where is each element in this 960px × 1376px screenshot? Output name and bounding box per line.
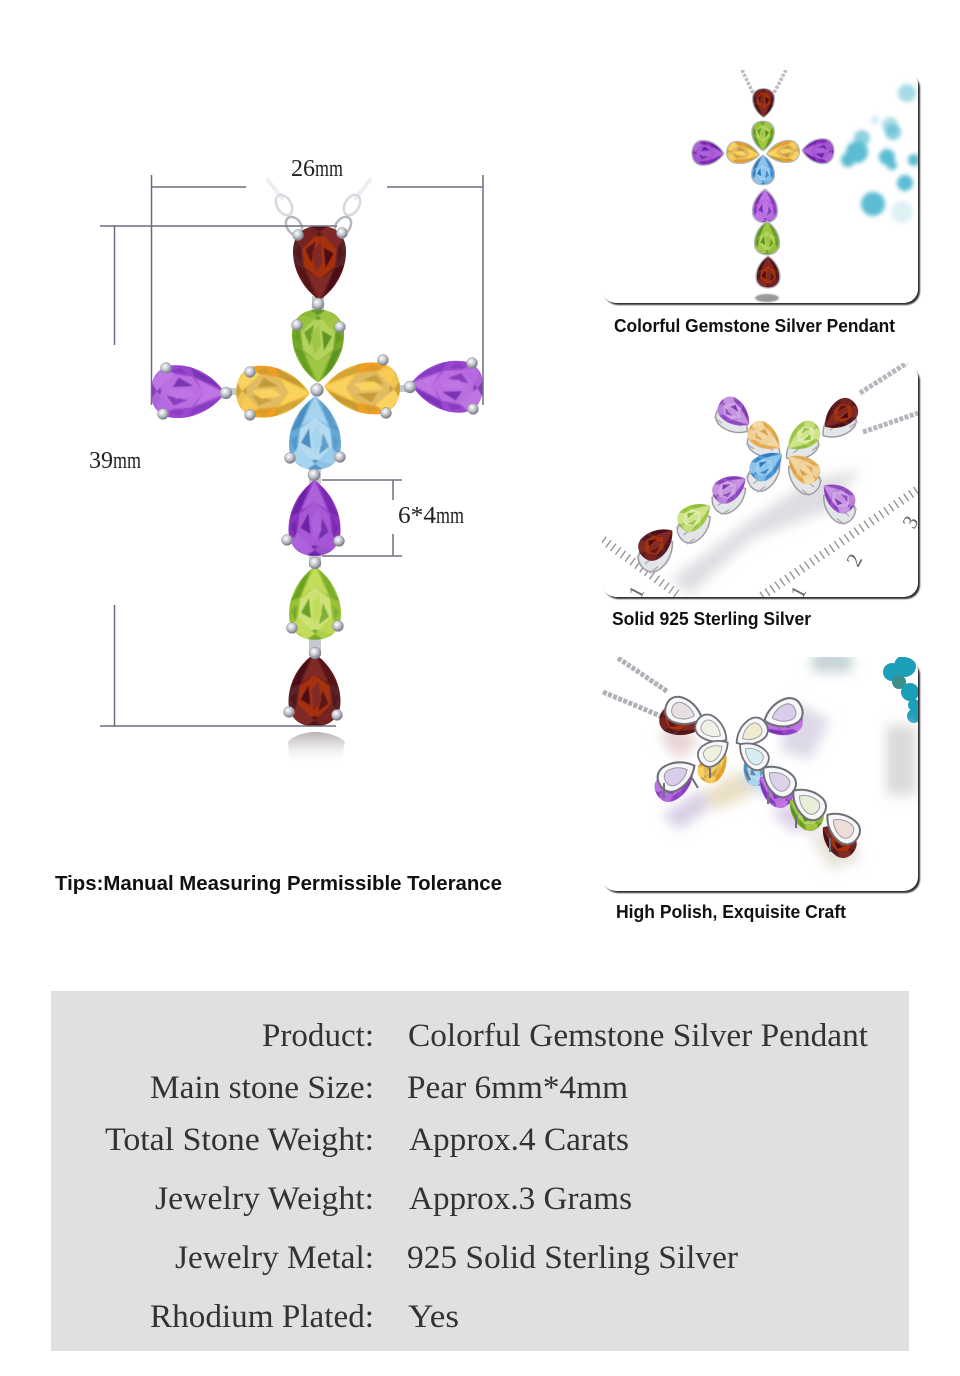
ruler numbers: 2: [841, 550, 867, 570]
gem: right citrine: [321, 357, 403, 419]
row: jewelry metal: 925 Solid Sterling Silver: [407, 1240, 738, 1276]
silver settings: [633, 399, 861, 577]
blue flowers: [883, 657, 918, 723]
label: width 26mm: [291, 156, 343, 182]
angled stones: [638, 396, 858, 561]
ruler numbers: 1: [623, 582, 649, 602]
blurred background shadows: [660, 650, 916, 870]
row: rhodium plated: Rhodium Plated:: [150, 1299, 374, 1335]
chain: [742, 70, 786, 93]
panel: back view: [602, 650, 921, 893]
gem: lower peridot: [285, 564, 345, 642]
gem: upper peridot: [288, 308, 348, 384]
coloured stone undersides: [654, 708, 857, 858]
row: main stone size: [150, 1070, 628, 1106]
label: height 39mm: [89, 448, 141, 474]
row: rhodium plated: Yes: [408, 1299, 459, 1335]
table background: [51, 991, 909, 1351]
gem: left amethyst: [148, 360, 228, 424]
contact shadow: [755, 294, 779, 302]
ruler numbers: [630, 516, 918, 597]
row: jewelry metal: [175, 1240, 738, 1276]
caption: back view: High Polish, Exquisite Craft: [616, 902, 846, 922]
reflection: [288, 732, 345, 766]
row: jewelry weight: [155, 1181, 632, 1217]
caption: ruler view: Solid 925 Sterling Silver: [612, 609, 811, 629]
label: stone size 6*4mm: 6*4: [398, 503, 436, 529]
small cross stones: [691, 88, 835, 289]
gem: bottom garnet: [284, 652, 344, 728]
row: main stone size: Pear 6mm*4mm: [407, 1070, 628, 1106]
row: jewelry weight: Jewelry Weight:: [155, 1181, 374, 1217]
chains: [860, 363, 918, 432]
row: main stone size: Main stone Size:: [150, 1070, 374, 1106]
row: jewelry metal: Jewelry Metal:: [175, 1240, 374, 1276]
panel: ruler view: [602, 363, 923, 602]
silver connectors: [222, 296, 414, 656]
row: product: Product:: [262, 1018, 374, 1054]
gem: top garnet: [289, 224, 350, 302]
row: total stone weight: [105, 1122, 629, 1158]
gem: blue topaz: [285, 394, 345, 472]
silver back frames: [653, 693, 865, 849]
panel: front view: [602, 70, 920, 305]
label: stone size 6*4mm: [398, 503, 464, 529]
gem: lower amethyst: [284, 478, 344, 558]
silver posts: [664, 768, 830, 852]
chain: [268, 180, 370, 238]
ruler numbers: 1: [785, 582, 811, 602]
label: height 39mm: mm: [113, 448, 141, 474]
gem: right amethyst: [407, 353, 487, 419]
prongs: [158, 228, 478, 720]
soft shadows: [670, 470, 860, 595]
chains: [603, 658, 668, 717]
label: height 39mm: 39: [89, 448, 113, 474]
tolerance tip: Tips:Manual Measuring Permissible Tolerance: [55, 873, 502, 895]
label: width 26mm: 26: [291, 156, 315, 182]
blue flowers: [841, 84, 920, 223]
row: total stone weight: Approx.4 Carats: [409, 1122, 629, 1158]
ruler numbers: 3: [897, 512, 923, 532]
row: jewelry weight: Approx.3 Grams: [409, 1181, 632, 1217]
label: width 26mm: mm: [315, 156, 343, 182]
row: product: Colorful Gemstone Silver Pendant: [408, 1018, 868, 1054]
row: total stone weight: Total Stone Weight:: [105, 1122, 374, 1158]
label: stone size 6*4mm: mm: [436, 503, 464, 529]
ruler ticks: [603, 488, 920, 596]
gem: left citrine: [233, 361, 313, 423]
specification table: [51, 991, 909, 1351]
caption: front view: Colorful Gemstone Silver Pendant: [614, 316, 895, 336]
dimension lines: [100, 175, 483, 726]
main pendant diagram: [148, 180, 487, 766]
